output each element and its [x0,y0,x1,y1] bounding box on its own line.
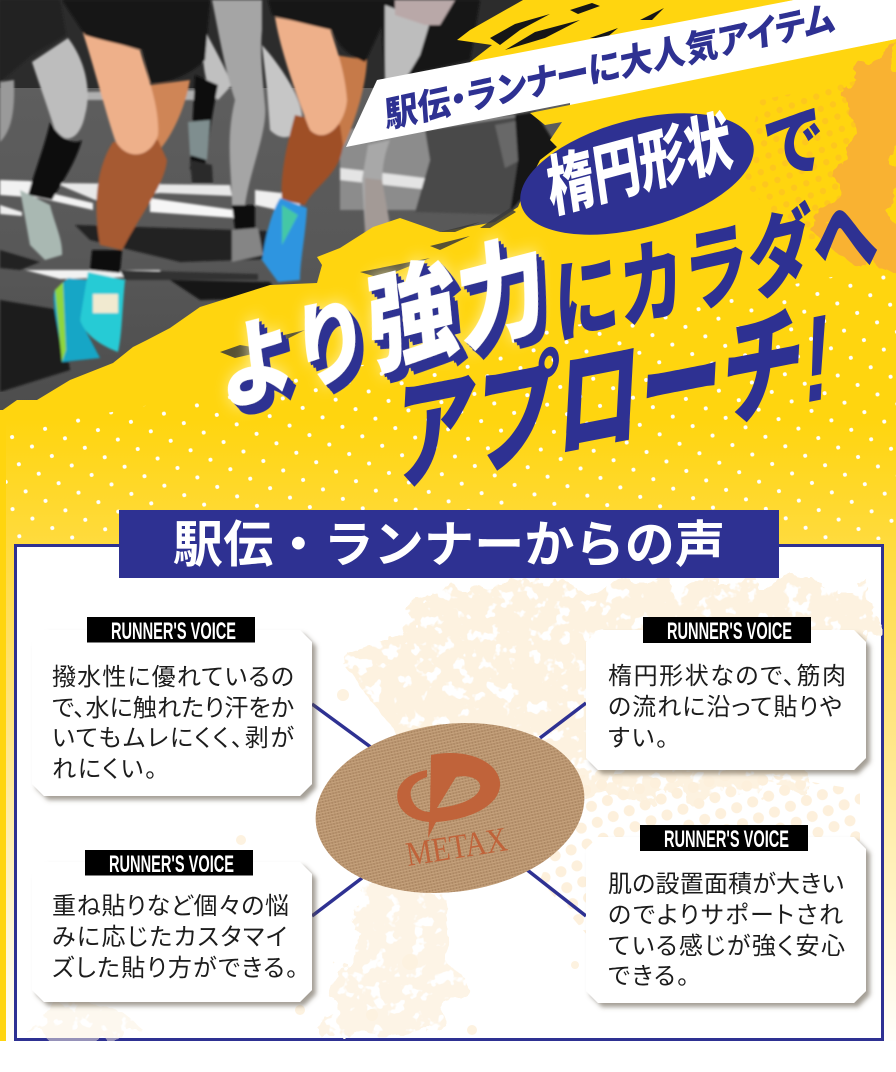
product: oval METAX patch [306,708,594,908]
headline: アプローチ！: アプローチ! [391,288,835,510]
voice text: 肌の設置面積が大きい [608,871,844,898]
photo detail: dark backdrop above banner [380,0,480,80]
decoration: cream splatter [17,580,881,1038]
voice text: れにくい。 [52,756,157,783]
voice text: のでよりサポートされ [608,902,843,929]
banner text: 駅伝・ランナーに大人気アイテム [384,0,837,137]
voice text: の流れに沿って貼りや [608,694,842,721]
photo detail: left runner [0,0,88,260]
badge: navy ellipse 楕円形状: 楕円形状 [543,105,737,227]
voice text: すい。 [608,725,668,752]
banner: white ribbon [346,0,896,147]
photo detail: rear runner [188,30,232,183]
card: voice 2 [32,850,312,1002]
voice text: 楕円形状なので、筋肉 [608,663,846,690]
voice text [608,871,845,990]
voice text [52,893,298,982]
decoration: white dots [0,265,896,540]
photo: runners' legs on a road [0,0,570,420]
tag: runner's voice [85,850,253,878]
logo wordmark: METAX [403,819,510,873]
tag: runner's voice: RUNNER'S VOICE [109,851,234,878]
voice text: 重ね貼りなど個々の悩 [52,893,289,920]
voice text: で、水に触れたり汗をか [52,695,294,722]
headline: にカラダへ: にカラダへ [552,182,881,358]
card: voice 4 [586,825,866,1003]
voice text [608,663,846,752]
panel: runner voices [16,546,882,1040]
section heading bar: 駅伝・ランナーからの声 [173,517,725,573]
photo detail: right gray runners [362,0,558,235]
tag: runner's voice [87,617,255,645]
decoration: orange splash [740,40,896,270]
tag: runner's voice: RUNNER'S VOICE [111,618,236,645]
voice text: 撥水性に優れているの [52,664,294,691]
tag: runner's voice: RUNNER'S VOICE [664,826,789,853]
voice text: みに応じたカスタマイ [52,924,287,951]
voice text: ている感じが強く安心 [608,933,845,960]
voice text: ズした貼り方ができる。 [52,955,298,982]
voice text [52,664,294,783]
photo detail: front runner C [262,0,395,282]
photo detail: gray runner [212,0,302,262]
voice text: できる。 [608,963,689,990]
card: voice 3 [586,617,866,770]
badge: navy ellipse 楕円形状 [507,91,767,257]
decoration: yellow splash above banner [457,0,794,62]
decoration: dark streaks along brush edge [220,208,516,358]
headline: より強力: より強力 [213,222,552,429]
connector lines [312,703,586,916]
left yellow strip [0,410,6,1041]
photo detail: front runner A [54,0,210,362]
heading particle で: で [760,96,829,194]
tag: runner's voice [643,617,811,645]
voice text: いてもムレにくく、剥が [52,725,294,752]
icon: METAX logo [397,753,500,838]
section heading bar [119,510,779,578]
tag: runner's voice: RUNNER'S VOICE [667,618,792,645]
tag: runner's voice [640,825,808,853]
card: voice 1 [32,617,312,796]
